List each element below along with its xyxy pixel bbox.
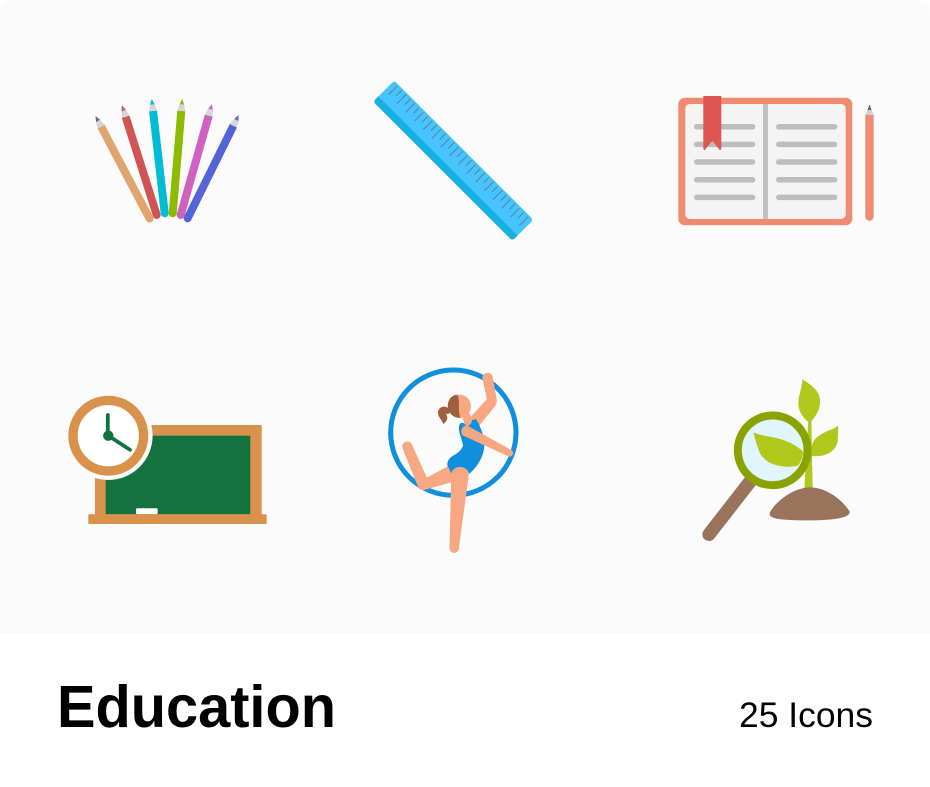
leotard <box>448 420 484 473</box>
bent leg <box>403 442 454 490</box>
ponytail <box>438 407 450 424</box>
top leaf <box>798 379 820 423</box>
raised arm <box>470 373 496 426</box>
stem <box>804 420 813 489</box>
icon count: 25 Icons <box>739 696 873 735</box>
hair <box>448 395 460 418</box>
right leaf <box>811 426 838 456</box>
icon: colored pencils <box>92 99 242 224</box>
chalk <box>136 508 158 514</box>
book cover <box>678 98 852 225</box>
pencil: pink <box>176 103 216 220</box>
icon: magnifier over plant <box>709 379 850 534</box>
icon: chalkboard with clock <box>64 391 267 524</box>
hoop <box>391 370 516 495</box>
chalk ledge <box>88 514 267 524</box>
book pages <box>685 104 846 219</box>
icon: gymnast with hoop <box>391 370 516 552</box>
text lines <box>694 124 837 200</box>
clock <box>64 391 153 480</box>
pencil: cyan <box>148 99 169 218</box>
title: Education <box>57 674 336 740</box>
board frame <box>95 425 262 517</box>
pencil: blue <box>182 113 242 224</box>
icon: open book with pencil <box>678 96 874 225</box>
head <box>448 395 471 418</box>
magnified leaf <box>753 432 803 467</box>
pencil: red <box>118 104 162 220</box>
neck <box>462 413 475 428</box>
icon: ruler <box>373 81 533 241</box>
magnifier ring <box>738 415 807 485</box>
magnifier handle <box>709 482 750 534</box>
pencil: green <box>168 99 186 218</box>
pencil: tan <box>92 114 155 224</box>
book spine <box>763 104 768 219</box>
magnifier glass <box>738 416 807 485</box>
green board <box>106 436 250 514</box>
standing leg <box>450 467 468 552</box>
soil mound <box>770 487 850 520</box>
side pencil <box>865 104 874 221</box>
side arm <box>462 426 513 456</box>
bookmark <box>703 96 721 150</box>
